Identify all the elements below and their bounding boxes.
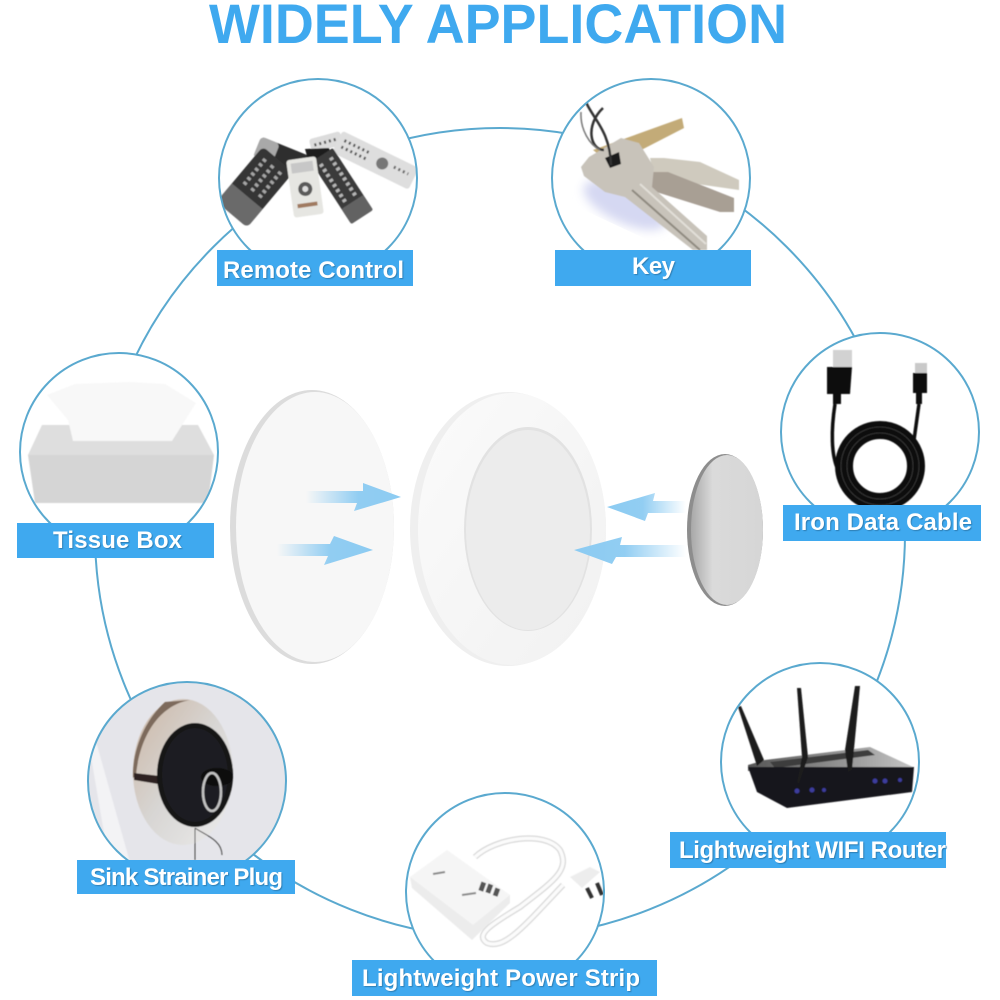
circle outline	[88, 682, 286, 880]
circle outline	[219, 79, 417, 277]
metal disc	[687, 454, 763, 606]
panel: iron data cable	[781, 333, 981, 541]
panel: power strip	[352, 793, 657, 996]
circle outline	[552, 79, 750, 277]
label	[555, 250, 751, 286]
arrow: top right	[607, 493, 686, 521]
icon: data cable	[827, 350, 927, 505]
icon: power strip	[410, 838, 602, 944]
label	[352, 960, 657, 996]
label text: Iron Data Cable	[794, 509, 972, 536]
icon: remote controls	[217, 131, 419, 227]
label	[783, 505, 981, 541]
connecting ring	[95, 128, 905, 938]
circle outline	[406, 793, 604, 991]
label text: Tissue Box	[53, 527, 183, 554]
panel: wifi router	[670, 663, 946, 868]
arrow: top left	[306, 483, 401, 511]
circle outline	[721, 663, 919, 861]
arrow: bottom right	[574, 537, 686, 564]
panel: sink strainer plug	[77, 682, 295, 894]
clear adhesive pad	[230, 390, 394, 664]
label text: Remote Control	[223, 257, 404, 284]
circle outline	[781, 333, 979, 531]
icon: sink plug	[92, 698, 234, 860]
panel: remote control	[217, 79, 419, 286]
icon: keys	[577, 100, 739, 250]
label	[217, 250, 413, 286]
label text: Lightweight Power Strip	[362, 965, 640, 992]
label text: Sink Strainer Plug	[90, 864, 283, 891]
arrow: bottom left	[277, 536, 373, 565]
label	[77, 860, 295, 894]
icon: tissue box	[28, 424, 214, 504]
round white holder	[410, 392, 606, 666]
label text: Key	[632, 253, 676, 280]
label	[17, 523, 214, 558]
label text: Lightweight WIFI Router	[679, 837, 946, 864]
illustration: adhesive disc assembly	[230, 390, 763, 666]
icon: router	[738, 686, 914, 808]
panel: tissue box	[17, 353, 218, 558]
circle outline	[20, 353, 218, 551]
panel: key	[552, 79, 751, 286]
label	[670, 832, 946, 868]
